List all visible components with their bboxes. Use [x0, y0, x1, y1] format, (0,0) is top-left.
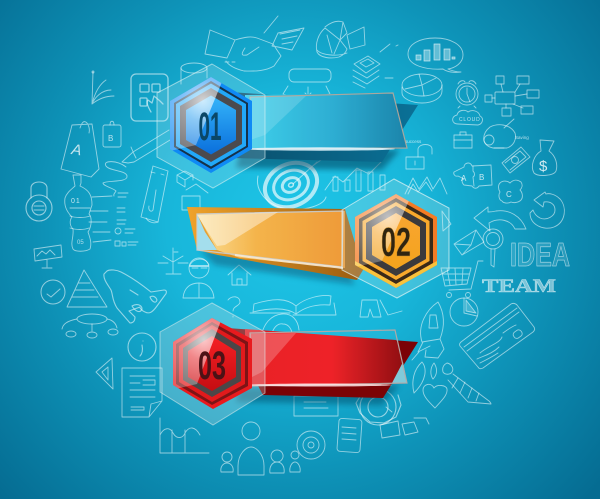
icon: envelope [442, 211, 484, 255]
icon: drops [413, 362, 437, 393]
text: TEAM: TEAM [482, 276, 556, 297]
panel 2: orange banner [187, 179, 449, 298]
icon: puzzle pieces: B [479, 173, 484, 182]
hexagon badge 02 [355, 194, 437, 288]
icon: stack of books [353, 44, 398, 88]
icon: briefcase [454, 132, 472, 148]
icon: triangle tag [96, 358, 113, 389]
rounded box with arrows [283, 69, 331, 96]
icon: tablet checklist [131, 74, 168, 121]
icon: gear upper [262, 314, 299, 333]
icon: piggy bank [484, 119, 529, 148]
glass hexagon [342, 179, 449, 298]
icon: shopping cart [441, 261, 483, 298]
icon: small box pair [174, 184, 208, 252]
number 02: 02 [381, 219, 411, 265]
icon: book [253, 295, 331, 314]
text: IDEA: IDEA [510, 236, 570, 273]
icon: shopping bag A: A [69, 141, 83, 159]
icon: curved arrow [474, 207, 526, 231]
number 01: 01 [198, 105, 222, 149]
icon: org chart [62, 314, 118, 338]
glass hexagon [160, 303, 265, 425]
reflection [355, 194, 412, 267]
icon: airplane [104, 270, 166, 323]
icon: candlestick chart [325, 162, 385, 191]
reflection [171, 318, 222, 390]
icon: pencil [122, 130, 170, 163]
icon: shopping bag A [61, 122, 99, 177]
icon: tablet [337, 418, 362, 453]
icon: credit card [460, 303, 535, 369]
number 03: 03 [198, 344, 226, 388]
icon: bottle with labels [65, 175, 138, 251]
icon: USB stick [141, 166, 168, 223]
icon: arrows fan [92, 71, 114, 104]
glass window see-through [197, 214, 217, 250]
icon: arrow in target [293, 160, 321, 184]
icon: document [122, 368, 162, 417]
icon: money bill [502, 147, 530, 173]
icon: gauge circle [297, 431, 325, 459]
icon: 3D pie [402, 74, 442, 103]
banner back [187, 207, 363, 280]
icon: question mark [228, 297, 240, 317]
icon: house [228, 265, 251, 285]
icon: small pie [450, 298, 478, 326]
banner back [230, 92, 418, 162]
icon: rocket [412, 302, 444, 360]
icon: puzzle C: C [506, 190, 512, 199]
glass frame [250, 330, 407, 386]
icon: small bag B [103, 121, 121, 147]
icon: alarm clock [456, 81, 478, 108]
glass frame [197, 211, 343, 267]
hexagon badge 01 [170, 77, 252, 173]
icon: bottle with labels: 05 [77, 240, 84, 246]
glass hexagon [157, 64, 265, 188]
icon: pyramid [67, 270, 107, 307]
icon: monitor [250, 303, 336, 315]
icon: money bag [532, 140, 557, 175]
panel 3: red banner [160, 303, 418, 425]
icon: piggy bank: Saving [515, 135, 529, 140]
icon: handshake [205, 16, 304, 71]
shadow [200, 250, 355, 285]
banner back [227, 328, 418, 398]
glass frame [250, 93, 407, 149]
icon: bottle with labels: 01 [71, 198, 81, 205]
icon: cylinder [181, 63, 207, 84]
icon: puzzle C [498, 180, 522, 203]
icon: open padlock [405, 139, 432, 169]
icon: cloud [453, 110, 482, 125]
reflection [170, 77, 224, 151]
banner front [197, 211, 345, 268]
banner highlight [235, 255, 343, 268]
icon: gear lower right [356, 389, 401, 425]
icon: necktie [443, 363, 491, 404]
shadow [236, 150, 400, 170]
outer lower yellow rim [355, 261, 437, 288]
icon: cloud: CLOUD [459, 117, 481, 123]
icon: heart [423, 384, 447, 408]
icon: open padlock: success [405, 139, 422, 144]
icon: info circle [128, 333, 156, 361]
icon: small box under panel 1 [177, 171, 193, 187]
banner highlight [248, 384, 392, 386]
icon: target [258, 155, 324, 215]
banner highlight [245, 147, 395, 151]
glass reflection [250, 333, 296, 378]
icon: small bag B: B [108, 134, 113, 143]
see-through corner [392, 362, 407, 383]
icon: magnifier [483, 229, 503, 267]
banner front [245, 329, 403, 386]
icon: mind map [485, 76, 539, 116]
banner front [245, 93, 407, 150]
glass reflection [197, 212, 278, 246]
icon: money bag: $ [539, 158, 548, 175]
icon: speech bubble chart [408, 38, 463, 72]
icon: clipboard [294, 396, 338, 416]
shadow [236, 385, 400, 405]
icon: puzzle pieces: A [461, 174, 467, 183]
icon: team people [221, 422, 300, 475]
icon: pie chart [316, 21, 365, 58]
panel 1: blue banner [157, 64, 418, 188]
glass reflection [250, 96, 306, 140]
icon: puzzle pieces [454, 163, 492, 188]
icon: padlock [26, 182, 52, 221]
icon: recycle arrow [530, 192, 564, 228]
icon: line graph [160, 418, 209, 453]
icon: small papers [380, 407, 429, 438]
hexagon badge 03 [171, 318, 252, 409]
squiggle [103, 162, 127, 196]
icon: presentation board [34, 245, 62, 268]
icon: target outer arc [258, 176, 326, 209]
icon: check circle [41, 280, 65, 304]
icon: person with glasses [183, 258, 214, 298]
icon: mountains chart [405, 177, 447, 194]
icon: tree chart [158, 248, 188, 274]
icon: person pants [360, 300, 402, 317]
